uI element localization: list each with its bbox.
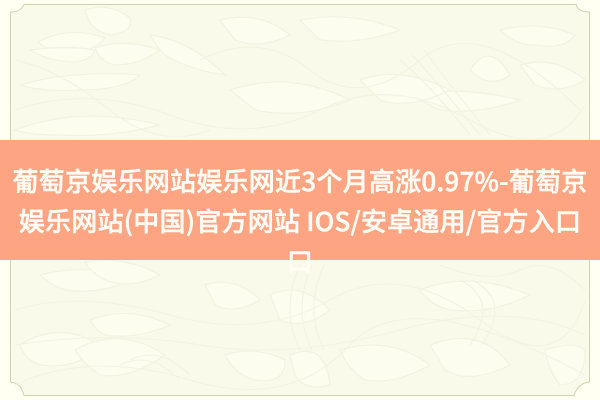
title text: 口: [287, 242, 313, 279]
title text: 娱乐网站(中国)官方网站 IOS/安卓通用/官方入口: [19, 202, 581, 239]
title text: 葡萄京娱乐网站娱乐网近3个月高涨0.97%-葡萄京: [12, 162, 587, 199]
title text: [12, 162, 587, 279]
salmon title band: [0, 140, 600, 260]
